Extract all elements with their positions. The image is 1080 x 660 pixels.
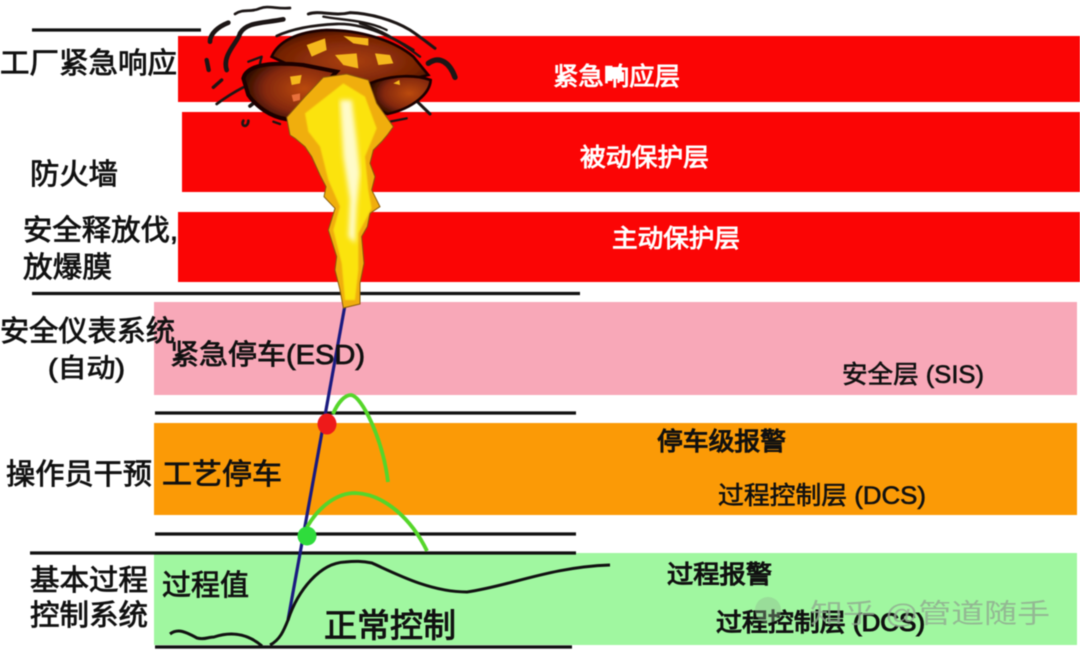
text: emergency shutdown ESD: 紧急停车(ESD) bbox=[170, 339, 365, 370]
band: passive protection layer bbox=[182, 112, 1080, 192]
fireball highlights bbox=[290, 36, 400, 102]
smoke wisps bbox=[207, 7, 455, 126]
band: process control layer orange bbox=[154, 423, 1077, 515]
text: shutdown alarm: 停车级报警 bbox=[657, 428, 786, 456]
fireball right lobe bbox=[370, 76, 431, 114]
flame bright interior bbox=[305, 83, 377, 300]
text: process control layer DCS green: 过程控制层 (DCS) bbox=[716, 609, 925, 637]
left label: basic process control system: 基本过程 bbox=[30, 564, 148, 597]
left label: control system: 控制系统 bbox=[30, 599, 148, 632]
black process curve bbox=[170, 561, 610, 646]
text: process alarm: 过程报警 bbox=[667, 561, 772, 589]
band: active protection layer bbox=[178, 212, 1080, 282]
band text: passive protection layer: 被动保护层 bbox=[580, 144, 709, 172]
band: basic process control green bbox=[154, 553, 1077, 645]
watermark icon bbox=[755, 597, 781, 623]
explosion bbox=[207, 7, 455, 308]
text: safety layer SIS: 安全层 (SIS) bbox=[842, 361, 984, 389]
fireball left lobe bbox=[243, 64, 337, 119]
text: process shutdown: 工艺停车 bbox=[162, 458, 282, 491]
flame white core bbox=[340, 100, 360, 243]
band: emergency response layer bbox=[178, 36, 1080, 102]
band: safety layer SIS bbox=[154, 302, 1077, 395]
green alarm curve upper bbox=[333, 395, 388, 482]
band text: emergency response layer: 紧急响应层 bbox=[553, 63, 680, 91]
red trip point bbox=[318, 414, 336, 434]
separator lines bbox=[30, 30, 580, 647]
left label: rupture disc: 放爆膜 bbox=[23, 251, 112, 284]
flame column bbox=[287, 74, 393, 308]
text: process control layer DCS orange: 过程控制层 (DCS) bbox=[718, 482, 926, 510]
left label: safety instrumented system: 安全仪表系统 bbox=[0, 315, 175, 348]
green alarm point bbox=[298, 526, 316, 546]
process value rising line bbox=[288, 305, 345, 620]
text: normal control: 正常控制 bbox=[324, 607, 456, 644]
fireball cap bbox=[272, 30, 428, 87]
text: process value: 过程值 bbox=[162, 569, 249, 602]
left label: firewall: 防火墙 bbox=[30, 158, 118, 191]
white blot over response character bbox=[607, 67, 622, 79]
left label: automatic: (自动) bbox=[48, 353, 125, 383]
watermark: 知乎 @管道随手 bbox=[810, 599, 1050, 629]
green alarm curve lower bbox=[307, 493, 427, 551]
left label: operator intervention: 操作员干预 bbox=[6, 458, 152, 491]
left label: plant emergency response: 工厂紧急响应 bbox=[0, 47, 177, 80]
left label: relief valve and rupture disc: 安全释放伐, bbox=[23, 214, 178, 247]
band text: active protection layer: 主动保护层 bbox=[612, 225, 740, 253]
